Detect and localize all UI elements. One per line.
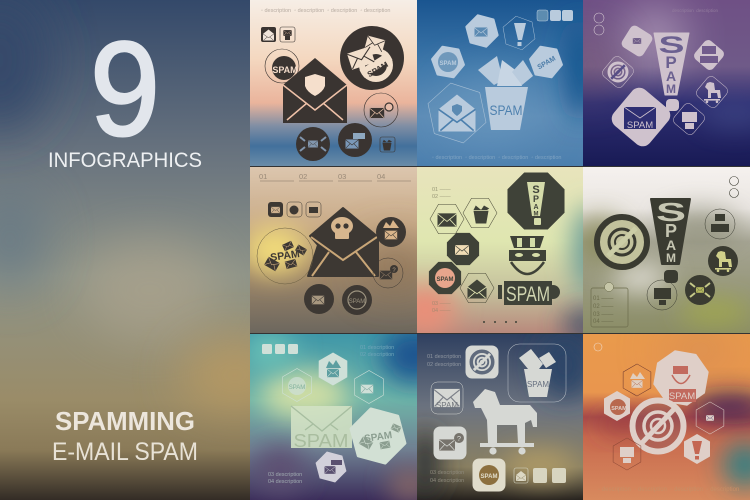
octagon: envelope [447,233,479,265]
icon: spammer with spam sign [498,236,560,306]
circle: trojan horse [708,246,738,276]
icon: warning envelope [304,284,334,314]
diamond: spammer [694,40,724,70]
hexagon: spam envelopes [528,46,564,78]
panel 7: teal and purple [245,327,449,500]
icon: exclamation with spam: A [666,68,676,84]
hexagon: spam ball [597,387,637,425]
small circle icons [730,176,738,198]
icon: spam envelope [338,123,372,157]
legend bottom: 03 description [430,470,464,476]
icon: spam ball [265,49,299,83]
header legend: ◦ description ◦ description ◦ description ◦ description [261,8,390,14]
legend top [427,354,461,368]
heading: infographics: INFOGRAPHICS [48,149,202,172]
icon: question envelope: ? [392,268,396,274]
legend bottom: 03 description [268,472,302,478]
octagon: exclamation spam: A [533,204,539,211]
legend bottom [430,470,464,484]
outline rounded square: spam bin: SPAM [527,380,549,389]
octagon: spam envelopes [429,262,461,294]
legend top: 01 description [427,354,461,360]
hexagon: spam envelopes [430,46,466,78]
icon: trojan horse [473,389,537,455]
heading: spamming: SPAMMING [55,406,195,436]
left panel: title column [0,0,250,500]
panel 9: orange [583,334,750,500]
rounded square: question envelope [434,426,466,460]
list card: 04 —— [593,319,613,325]
hexagon: spam envelope [312,449,350,485]
outline rounded square: spam bin [508,344,566,402]
hexagon: spam ball: SPAM [611,406,627,412]
legend top: 02 description [360,352,394,358]
diamond: spam envelope: SPAM [627,120,653,131]
legend bottom [432,301,451,314]
diamond outline: computer warning [673,103,705,135]
caption text: description description [672,8,719,13]
icon: skull envelope [308,208,378,276]
small circle icons [594,13,604,35]
icon: spam ball: SPAM [272,65,298,75]
octagon: exclamation spam: S [532,184,540,196]
legend top: 01 —— [432,187,451,193]
octagon: exclamation spam: M [534,212,538,218]
octagon: spam envelopes: SPAM [437,277,453,283]
legend top: 02 —— [432,194,451,200]
blob: spam envelopes [257,228,313,284]
hexagon: spam envelopes [345,405,411,467]
octagon: spammer with spam sign [651,348,711,408]
outline hexagon: computer warning [606,434,648,474]
list card: 02 —— [593,304,613,310]
panel 5: green and salmon [395,167,608,343]
small icon: bin outline [280,27,295,42]
octagon: spammer with spam sign: SPAM [669,391,695,402]
icon: exclamation with spam [654,32,689,111]
diamond: spam envelope [612,88,670,146]
octagon: exclamation spam: P [533,194,539,204]
legend bottom: 04 description [430,478,464,484]
icon: envelope with arrows [296,127,330,161]
icon: burning envelope [376,217,406,247]
icon: exclamation spam: P [665,221,677,241]
outline hexagon: spam ball [276,364,318,406]
blob: spam envelopes: SPAM [270,248,301,264]
list card [591,282,628,327]
diamond outline: trojan horse [696,76,728,108]
hexagon: envelope badge [465,14,499,48]
icon: large spam envelope: SPAM [294,431,348,451]
diamond: arrows envelope [622,26,652,56]
icon: exclamation spam: A [666,237,676,253]
list card: 01 —— [593,296,613,302]
icon: exclamation with spam: S [658,32,684,59]
icon: blocked envelope [364,93,398,127]
diamond outline: no at sign [602,56,634,88]
numbered header [259,174,411,182]
ring: no at sign [632,400,684,452]
small icon: open envelope [261,27,276,42]
icon: spam bin with envelopes [478,56,533,130]
list card: 03 —— [593,312,613,318]
legend top [432,187,451,200]
icon: spammer with spam sign: SPAM [506,283,550,306]
icon: exclamation spam: S [656,197,686,227]
circle: arrows envelope [685,275,715,305]
legend bottom: 04 —— [432,308,451,314]
numbered header: 04 [377,172,385,181]
small icon: flower bin [380,137,395,152]
legend bottom [268,472,302,485]
legend top: 01 description [360,345,394,351]
subheading: e-mail spam: E-MAIL SPAM [52,438,198,466]
rounded square: question envelope: ? [457,434,461,443]
small icons row [514,468,566,483]
panel 6: white with blurred foliage [575,167,750,333]
outline rounded square: spam envelope: SPAM [436,401,458,410]
panel 8: dark slate and tan [409,333,591,500]
outline circle: computer warning [647,280,677,310]
icon: envelopes with spam ban [340,26,404,90]
rounded square: spam envelopes: SPAM [481,474,497,480]
icon: no at sign [597,217,647,267]
icon: no spam [342,285,372,315]
hexagon outline: shield envelope [428,82,486,144]
footer legend: ◦ description ◦ description ◦ description ◦ description [432,155,561,161]
icon: question envelope [373,258,403,288]
small icons row [268,202,321,217]
hexagon: spam envelopes: SPAM [440,61,456,67]
outline hexagon: blocked envelope [348,366,390,408]
small icons row [262,344,298,354]
small icons row [537,10,573,21]
panel 3: purple [568,0,750,166]
icon: exclamation spam: M [666,251,676,265]
legend top [360,345,394,358]
numbered header: 02 [299,172,307,181]
pagination dots [483,321,517,323]
icon: envelopes with spam ban: SPAM [366,60,390,79]
numbered header: 01 [259,172,267,181]
panel 1: peach [250,0,417,166]
legend bottom: 03 —— [432,301,451,307]
icon: no spam: SPAM [349,299,365,305]
icon: exclamation with spam: M [666,82,676,96]
icon: exclamation with spam: P [665,53,677,72]
hexagon: spam envelopes: SPAM [536,55,557,71]
outline hexagon: heart envelope [460,273,494,303]
rounded square: no at sign [466,346,498,378]
small circle icon [594,343,602,351]
icon: large spam envelope [291,406,352,451]
outline circle: spammer [705,209,735,239]
rounded square: spam envelopes [472,458,506,492]
hexagon: exclamation [677,430,717,468]
legend bottom: 04 description [268,479,302,485]
outline hexagon: spam ball: SPAM [289,385,305,391]
panel 4: tan [243,167,425,333]
icon: spam bin with envelopes: SPAM [490,102,522,118]
icon: open envelope with shield [283,58,347,123]
outline hexagon: arrows envelope [689,398,731,438]
octagon: exclamation spam [507,172,565,230]
footer legend: ◦ description ◦ description ◦ description ◦ description [598,487,739,493]
hexagon outline: exclamation [502,16,536,50]
hexagon: burning envelope [312,348,354,390]
panel 2: blue [417,0,594,166]
hexagon: spam envelopes: SPAM [364,430,393,445]
outline rounded square: spam envelope [431,382,463,414]
outline hexagon: bin [463,198,497,228]
numbered header: 03 [338,172,346,181]
outline hexagon: spam envelope [430,204,464,234]
legend top: 02 description [427,362,461,368]
icon: exclamation spam [651,197,690,283]
big numeral 9: 9 [90,15,160,164]
outline hexagon: burning envelope [616,360,658,400]
